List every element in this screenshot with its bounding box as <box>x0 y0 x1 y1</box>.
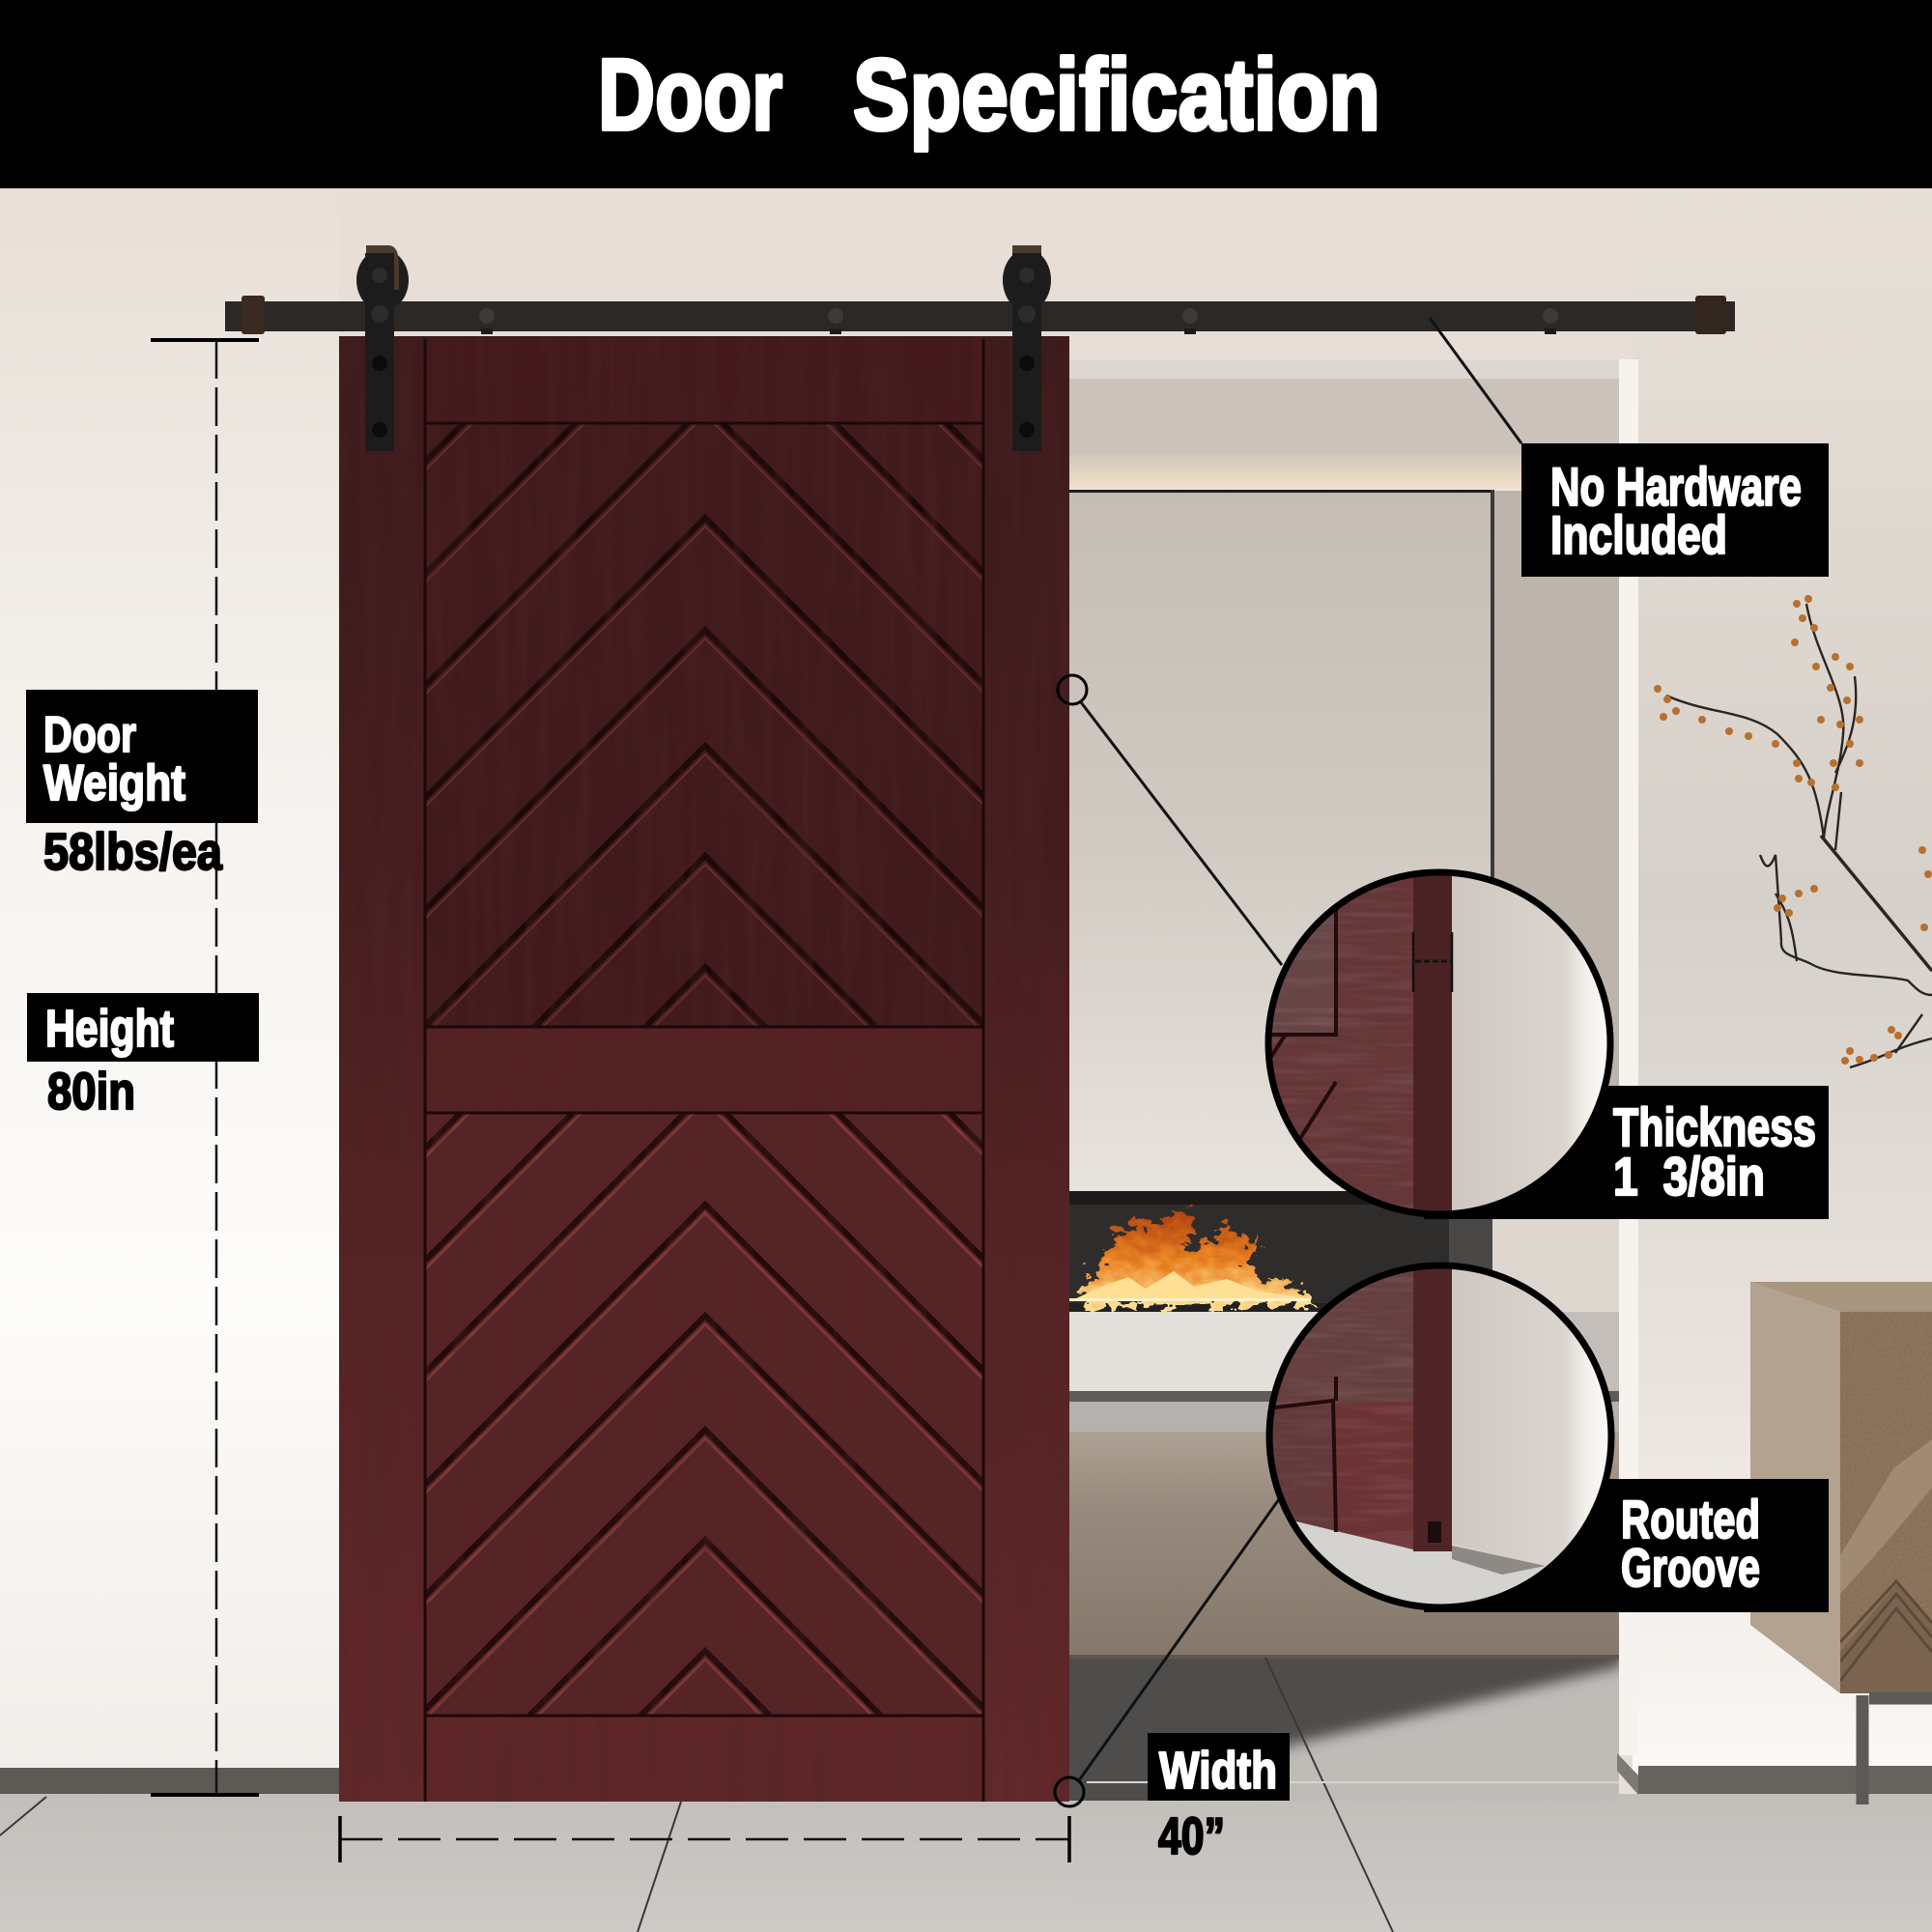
callout: thickness label box: 1 3/8in <box>1613 1146 1765 1207</box>
rail and stile joints <box>425 339 983 1802</box>
sideboard cabinet <box>1750 1282 1932 1804</box>
callout: no hardware included: No Hardware <box>1550 456 1802 517</box>
callout: no hardware included <box>1521 443 1829 577</box>
bottom rail <box>425 1716 983 1802</box>
left door hanger <box>356 245 409 451</box>
title: Door <box>598 39 782 152</box>
height dimension line <box>151 340 259 1795</box>
barn door <box>339 336 1069 1802</box>
callout: width <box>1148 1733 1290 1865</box>
magnifier: door thickness detail <box>1256 860 1623 1227</box>
callout: door weight: Weight <box>43 755 185 811</box>
top rail <box>425 339 983 423</box>
width dimension line <box>340 1816 1069 1862</box>
lower chevron panel <box>427 1115 981 1714</box>
callout: width: Width <box>1159 1742 1277 1800</box>
callout: height <box>27 993 259 1121</box>
icon: decorative branch with berries <box>1654 595 1932 1067</box>
magnifier: routed groove detail <box>1256 1256 1623 1623</box>
title: Specification <box>853 39 1380 152</box>
callout: door weight: Door <box>43 707 136 763</box>
height value: 80in <box>47 1063 135 1121</box>
interior view through the door opening <box>1053 359 1633 1821</box>
callout leader: thickness <box>1058 675 1282 965</box>
callout: no hardware included: Included <box>1550 504 1727 565</box>
upper chevron panel <box>427 425 981 1026</box>
callout leader: hardware <box>1430 318 1521 443</box>
callout: height: Height <box>45 1000 174 1058</box>
sliding track rail <box>225 296 1735 334</box>
door slab <box>339 336 1069 1802</box>
callout: routed groove label box: Groove <box>1621 1537 1760 1598</box>
callout: routed groove label box: Routed <box>1621 1489 1760 1549</box>
callout: routed groove label box <box>1424 1479 1829 1612</box>
header bar <box>0 0 1932 188</box>
callout: thickness label box <box>1424 1086 1829 1219</box>
middle rail <box>425 1027 983 1113</box>
icon: fireplace flames <box>1069 1208 1319 1306</box>
callout: thickness label box: Thickness <box>1613 1096 1816 1157</box>
width value: 40” <box>1158 1807 1225 1865</box>
right door hanger <box>1003 245 1051 451</box>
weight value: 58lbs/ea <box>43 823 223 881</box>
callout: door weight <box>26 690 258 881</box>
callout leader: width <box>1055 1499 1279 1806</box>
title <box>598 39 1380 152</box>
wood grain overlay <box>339 336 1069 1802</box>
